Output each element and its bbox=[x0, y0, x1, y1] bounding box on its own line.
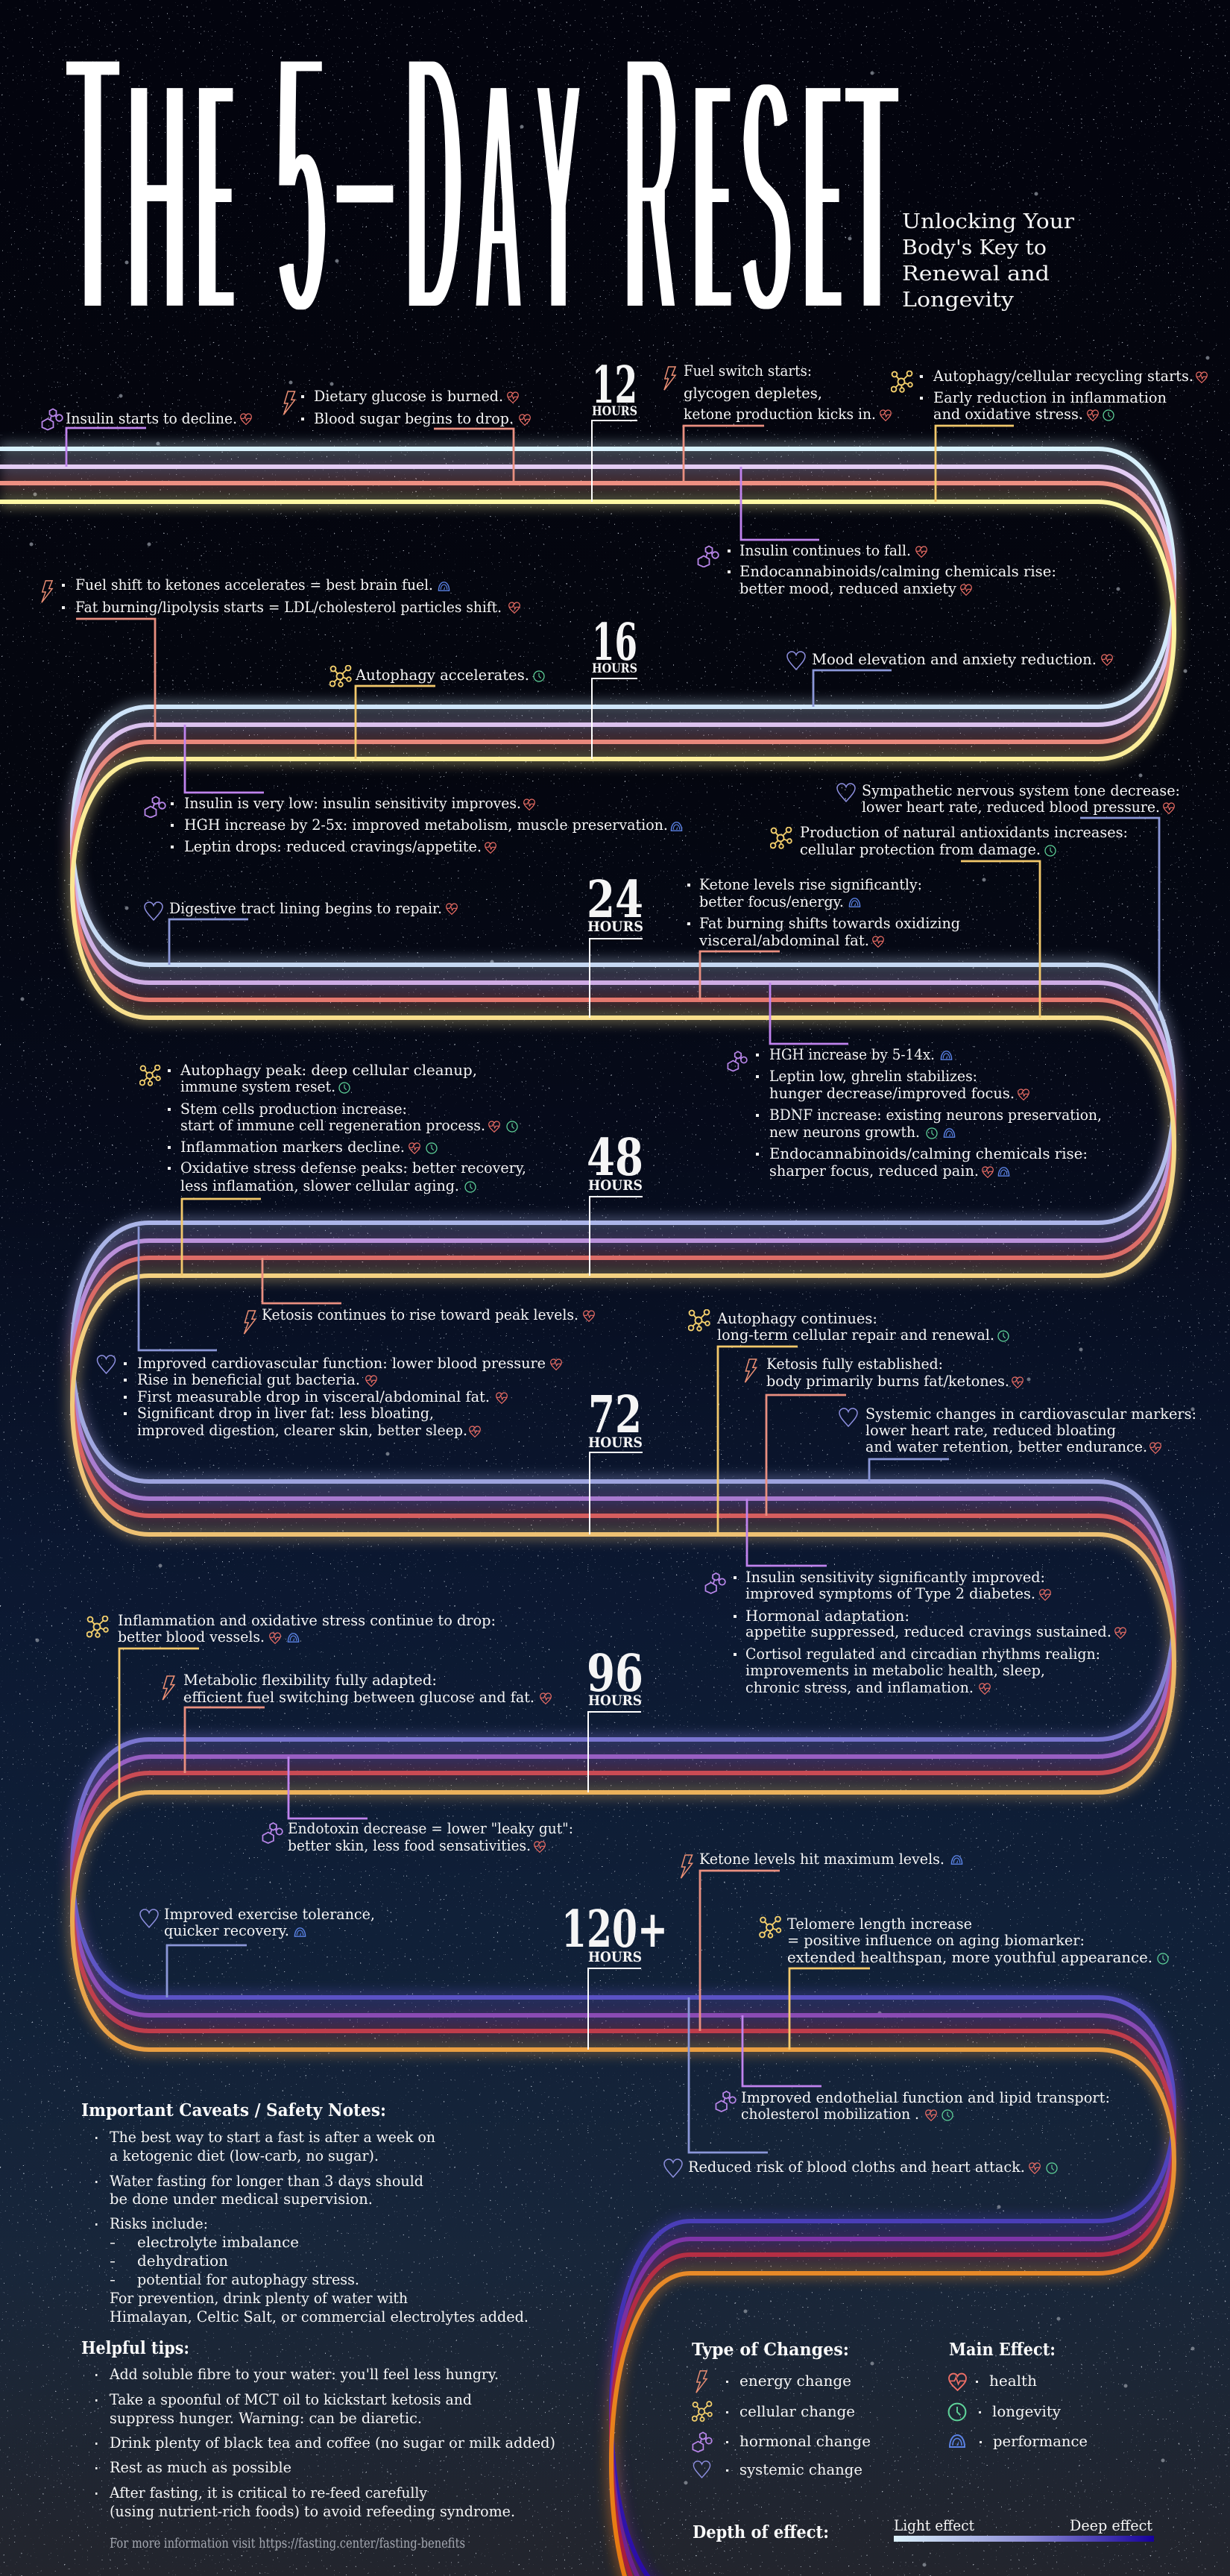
line: energy (salmon) bbox=[0, 483, 1174, 2576]
callout: insulin sensitivity significantly improved: Cortisol regulated and circadian rhythms realign: bbox=[745, 1645, 1100, 1663]
callout: metabolic flexibility: Metabolic flexibility fully adapted: bbox=[183, 1671, 437, 1689]
callout: fuel switch starts bbox=[664, 362, 891, 483]
marker: 120+ hours bbox=[561, 1900, 668, 2050]
heading: type of changes: Type of Changes: bbox=[692, 2340, 849, 2360]
subtitle: Renewal and bbox=[902, 262, 1050, 286]
subtitle: Longevity bbox=[902, 289, 1015, 312]
marker: 48 hours: 48 bbox=[587, 1128, 643, 1188]
callout: ketone levels rise: Fat burning shifts towards oxidizing bbox=[699, 914, 960, 932]
callout: insulin continues to fall: better mood, reduced anxiety bbox=[739, 579, 957, 597]
callout: autophagy starts: Early reduction in inflammation bbox=[933, 388, 1167, 406]
marker: 72 hours: HOURS bbox=[588, 1435, 643, 1451]
title: T bbox=[847, 0, 897, 394]
title: E bbox=[808, 0, 838, 394]
callout: fuel shift to ketones: Fuel shift to ketones accelerates = best brain fuel. bbox=[75, 576, 433, 593]
panel: helpful tips: Add soluble fibre to your water: you'll feel less hungry. bbox=[109, 2365, 499, 2383]
marker: 12 hours bbox=[592, 356, 637, 502]
heading: depth of effect: Depth of effect: bbox=[693, 2522, 829, 2542]
callout: reduced risk of blood cloths: Reduced risk of blood cloths and heart attack. bbox=[688, 2158, 1025, 2176]
panel: important caveats and safety notes: Himalayan, Celtic Salt, or commercial electrolytes added. bbox=[110, 2308, 529, 2325]
marker: 24 hours: HOURS bbox=[587, 919, 643, 935]
callout: ketone levels hit maximum bbox=[681, 1850, 962, 2031]
callout: ketone levels rise bbox=[687, 875, 960, 1000]
marker: 72 hours: 72 bbox=[588, 1385, 642, 1445]
callout: inflammation and oxidative stress bbox=[87, 1611, 496, 1800]
legend: type of changes: energy change bbox=[739, 2372, 851, 2390]
callout: telomere length: Telomere length increase bbox=[787, 1915, 972, 1933]
panel: helpful tips: suppress hunger. Warning: can be diaretic. bbox=[110, 2409, 422, 2427]
marker: 16 hours bbox=[592, 613, 637, 759]
callout: improved cardiovascular function: Rise in beneficial gut bacteria. bbox=[137, 1370, 360, 1388]
callout: ketone levels rise: visceral/abdominal fat. bbox=[698, 931, 869, 949]
callout: HGH increase 5-14x: BDNF increase: existing neurons preservation, bbox=[769, 1106, 1102, 1124]
callout: systemic changes in cardiovascular markers: Systemic changes in cardiovascular markers: bbox=[865, 1405, 1196, 1423]
callout: digestive tract bbox=[145, 899, 457, 965]
callout: autophagy continues: long-term cellular repair and renewal. bbox=[717, 1326, 994, 1344]
title bbox=[68, 0, 897, 407]
callout: insulin starts to decline: Insulin starts to decline. bbox=[66, 409, 237, 427]
callout: HGH increase 5-14x: new neurons growth. bbox=[769, 1123, 920, 1141]
callout: fuel switch starts: glycogen depletes, bbox=[684, 384, 822, 402]
callout: autophagy continues: Autophagy continues: bbox=[716, 1309, 877, 1327]
callout: inflammation and oxidative stress: better blood vessels. bbox=[118, 1628, 265, 1646]
callout: insulin continues to fall: Insulin continues to fall. bbox=[739, 541, 911, 559]
callout: digestive tract: Digestive tract lining begins to repair. bbox=[169, 899, 442, 917]
callout: inflammation and oxidative stress: Inflammation and oxidative stress continue to drop: bbox=[118, 1611, 496, 1629]
title: – bbox=[333, 84, 397, 277]
callout: metabolic flexibility: efficient fuel switching between glucose and fat. bbox=[183, 1688, 534, 1706]
callout: telomere length: extended healthspan, more youthful appearance. bbox=[787, 1948, 1152, 1966]
marker: 12 hours: 12 bbox=[592, 356, 637, 415]
legend: depth of effect: Light effect bbox=[894, 2516, 974, 2534]
callout: HGH increase 5-14x bbox=[728, 983, 1102, 1180]
callout: natural antioxidants: Production of natural antioxidants increases: bbox=[800, 823, 1128, 841]
marker: 96 hours bbox=[587, 1644, 643, 1792]
callout: autophagy accelerates: Autophagy accelerates. bbox=[355, 666, 529, 684]
callout: telomere length bbox=[760, 1915, 1168, 2050]
title: Y bbox=[535, 0, 581, 394]
subtitle bbox=[902, 210, 1074, 312]
callout: systemic changes in cardiovascular markers: and water retention, better endurance. bbox=[865, 1437, 1147, 1455]
callout: systemic changes in cardiovascular markers bbox=[839, 1405, 1196, 1481]
subtitle: Unlocking Your bbox=[902, 210, 1074, 233]
callout: HGH increase 5-14x: Leptin low, ghrelin stabilizes: bbox=[769, 1067, 977, 1085]
callout: autophagy peak bbox=[140, 1061, 526, 1276]
callout: autophagy peak: start of immune cell regeneration process. bbox=[180, 1116, 485, 1134]
glowing lines: the fasting timeline ribbon bbox=[0, 449, 1174, 2576]
title: E bbox=[201, 0, 230, 394]
callout: insulin sensitivity significantly improved: improved symptoms of Type 2 diabetes. bbox=[745, 1584, 1035, 1602]
subtitle: Body's Key to bbox=[902, 236, 1047, 259]
callout: sympathetic nervous system bbox=[837, 781, 1180, 1011]
legend: type of changes: cellular change bbox=[739, 2402, 855, 2420]
callout: autophagy continues bbox=[689, 1309, 1009, 1534]
panel: important caveats and safety notes: a ketogenic diet (low-carb, no sugar). bbox=[110, 2147, 379, 2164]
heading: main effect: Main Effect: bbox=[949, 2340, 1056, 2360]
marker: 120+ hours: HOURS bbox=[588, 1949, 642, 1965]
callout: ketosis continues bbox=[244, 1258, 594, 1334]
panel: helpful tips: (using nutrient-rich foods) to avoid refeeding syndrome. bbox=[110, 2502, 515, 2520]
line glow bbox=[0, 449, 1174, 2576]
marker: 120+ hours: 120+ bbox=[561, 1900, 668, 1959]
callout: improved exercise tolerance bbox=[140, 1905, 375, 1997]
callout: autophagy peak: Oxidative stress defense peaks: better recovery, bbox=[180, 1159, 526, 1177]
callout: insulin sensitivity significantly improved: appetite suppressed, reduced cravings sustained. bbox=[745, 1622, 1111, 1640]
callout: improved exercise tolerance: quicker recovery. bbox=[164, 1921, 289, 1939]
callout: autophagy starts: Autophagy/cellular recycling starts. bbox=[933, 367, 1193, 385]
heading: helpful tips: Helpful tips: bbox=[81, 2338, 189, 2358]
callout: improved cardiovascular function: improved digestion, clearer skin, better sleep. bbox=[137, 1421, 467, 1439]
marker: 16 hours: HOURS bbox=[592, 661, 637, 676]
marker: 48 hours: HOURS bbox=[588, 1177, 643, 1194]
callout: insulin starts to decline bbox=[42, 409, 251, 467]
callout: improved endothelial function bbox=[716, 2015, 1110, 2123]
panel: important caveats and safety notes: For prevention, drink plenty of water with bbox=[110, 2289, 408, 2307]
callout: dietary glucose: Dietary glucose is burned. bbox=[314, 387, 503, 405]
legend: main effect: longevity bbox=[992, 2402, 1062, 2420]
callout: sympathetic nervous system: lower heart rate, reduced blood pressure. bbox=[862, 798, 1160, 816]
callout: metabolic flexibility bbox=[163, 1671, 551, 1773]
callout: fuel shift to ketones bbox=[42, 576, 520, 742]
legend: type of changes: systemic change bbox=[739, 2460, 862, 2478]
panel: important caveats and safety notes: potential for autophagy stress. bbox=[137, 2270, 359, 2288]
callout: improved cardiovascular function: Significant drop in liver fat: less bloating, bbox=[137, 1404, 434, 1422]
title: H bbox=[128, 0, 186, 394]
callout: insulin is very low: Leptin drops: reduced cravings/appetite. bbox=[184, 837, 482, 855]
callout: autophagy starts: and oxidative stress. bbox=[933, 405, 1083, 423]
panel: helpful tips: Rest as much as possible bbox=[110, 2458, 291, 2476]
callout: endotoxin decrease bbox=[262, 1757, 573, 1854]
callout: improved cardiovascular function: First measurable drop in visceral/abdominal fat. bbox=[137, 1388, 490, 1405]
callout: fuel switch starts: ketone production kicks in. bbox=[684, 405, 876, 423]
callout: endotoxin decrease: better skin, less food sensativities. bbox=[288, 1836, 531, 1854]
panel: helpful tips: Drink plenty of black tea and coffee (no sugar or milk added) bbox=[110, 2434, 555, 2451]
marker: 12 hours: HOURS bbox=[592, 404, 637, 419]
legend: type of changes: hormonal change bbox=[739, 2432, 871, 2450]
callout: insulin sensitivity significantly improved: Hormonal adaptation: bbox=[745, 1607, 909, 1625]
callout: ketone levels rise: better focus/energy. bbox=[699, 892, 844, 910]
callout: dietary glucose bbox=[283, 387, 530, 483]
callout: systemic changes in cardiovascular markers: lower heart rate, reduced bloating bbox=[865, 1421, 1116, 1439]
callout: fuel shift to ketones: Fat burning/lipolysis starts = LDL/cholesterol particles shift. bbox=[75, 598, 502, 616]
callout: improved cardiovascular function: Improved cardiovascular function: lower blood pressure bbox=[137, 1354, 546, 1372]
callout: autophagy peak: less inflamation, slower cellular aging. bbox=[180, 1177, 459, 1194]
callout: fuel switch starts: Fuel switch starts: bbox=[684, 362, 812, 380]
legend: depth of effect: Deep effect bbox=[1070, 2516, 1152, 2534]
callout: ketosis fully established bbox=[745, 1355, 1023, 1516]
callout: insulin sensitivity significantly improved: improvements in metabolic health, sleep, bbox=[745, 1661, 1045, 1679]
legend: depth of effect bbox=[693, 2516, 1154, 2542]
panel: important caveats and safety notes: Water fasting for longer than 3 days should bbox=[110, 2172, 423, 2190]
panel: important caveats and safety notes bbox=[81, 2100, 529, 2325]
callout: HGH increase 5-14x: HGH increase by 5-14x. bbox=[769, 1045, 935, 1063]
panel: important caveats and safety notes: The best way to start a fast is after a week on bbox=[110, 2128, 435, 2146]
callout: endotoxin decrease: Endotoxin decrease = lower "leaky gut": bbox=[288, 1819, 573, 1837]
panel: important caveats and safety notes: dehydration bbox=[137, 2252, 228, 2270]
callout: insulin is very low: Insulin is very low: insulin sensitivity improves. bbox=[184, 794, 521, 812]
callout: HGH increase 5-14x: Endocannabinoids/calming chemicals rise: bbox=[769, 1144, 1088, 1162]
panel: important caveats and safety notes: - bbox=[110, 2270, 116, 2288]
panel: helpful tips: Take a spoonful of MCT oil to kickstart ketosis and bbox=[110, 2390, 472, 2408]
callout: insulin is very low bbox=[145, 725, 682, 855]
callout: insulin sensitivity significantly improved: chronic stress, and inflamation. bbox=[745, 1678, 974, 1696]
legend: type of changes bbox=[692, 2340, 871, 2478]
marker: 24 hours bbox=[587, 870, 643, 1018]
callout: insulin continues to fall: Endocannabinoids/calming chemicals rise: bbox=[739, 562, 1056, 580]
panel: important caveats and safety notes: - bbox=[110, 2233, 116, 2251]
panel: helpful tips: After fasting, it is critical to re-feed carefully bbox=[109, 2484, 428, 2501]
callout: mood elevation: Mood elevation and anxiety reduction. bbox=[812, 650, 1097, 668]
line: hormonal (lilac) bbox=[0, 467, 1174, 2576]
panel: helpful tips bbox=[81, 2338, 555, 2520]
marker: 48 hours bbox=[587, 1128, 643, 1276]
callout: insulin sensitivity significantly improved: Insulin sensitivity significantly improved: bbox=[745, 1568, 1045, 1586]
callout: autophagy peak: immune system reset. bbox=[180, 1077, 335, 1095]
callout: dietary glucose: Blood sugar begins to drop. bbox=[314, 409, 514, 427]
callout: ketone levels hit maximum: Ketone levels hit maximum levels. bbox=[699, 1850, 944, 1868]
callout: improved cardiovascular function bbox=[97, 1226, 561, 1439]
marker: 96 hours: HOURS bbox=[588, 1692, 642, 1709]
callout: ketosis fully established: Ketosis fully established: bbox=[766, 1355, 943, 1373]
callout: insulin is very low: HGH increase by 2-5x: improved metabolism, muscle preservation. bbox=[184, 816, 668, 834]
legend: main effect bbox=[949, 2340, 1088, 2450]
heading: caveats: Important Caveats / Safety Notes: bbox=[81, 2100, 386, 2120]
panel: important caveats and safety notes: electrolyte imbalance bbox=[137, 2233, 299, 2251]
callout: ketosis continues: Ketosis continues to rise toward peak levels. bbox=[262, 1306, 578, 1323]
callout: autophagy peak: Inflammation markers decline. bbox=[180, 1138, 405, 1156]
callout: improved endothelial function: cholesterol mobilization . bbox=[741, 2105, 919, 2123]
callout: improved endothelial function: Improved endothelial function and lipid transport: bbox=[741, 2088, 1110, 2106]
callout: natural antioxidants: cellular protection from damage. bbox=[800, 840, 1041, 858]
callout: HGH increase 5-14x: hunger decrease/improved focus. bbox=[769, 1084, 1015, 1102]
marker: 96 hours: 96 bbox=[587, 1644, 643, 1704]
legend: main effect: health bbox=[989, 2372, 1037, 2390]
marker: 72 hours bbox=[588, 1385, 643, 1534]
panel: important caveats and safety notes: Risks include: bbox=[110, 2214, 208, 2232]
panel: important caveats and safety notes: be done under medical supervision. bbox=[110, 2190, 373, 2208]
callout: insulin sensitivity significantly improved bbox=[705, 1499, 1126, 1696]
callout: natural antioxidants bbox=[771, 823, 1128, 1018]
callout: mood elevation bbox=[787, 650, 1112, 707]
callout: ketone levels rise: Ketone levels rise significantly: bbox=[699, 875, 922, 893]
footnote: For more information visit https://fasting.center/fasting-benefits bbox=[110, 2536, 465, 2551]
title: S bbox=[741, 0, 792, 394]
marker: 24 hours: 24 bbox=[587, 870, 643, 930]
callout: ketosis fully established: body primarily burns fat/ketones. bbox=[766, 1372, 1009, 1390]
marker: 16 hours: 16 bbox=[592, 613, 637, 673]
callout: HGH increase 5-14x: sharper focus, reduced pain. bbox=[769, 1162, 979, 1180]
callout: autophagy accelerates bbox=[330, 666, 544, 759]
callout: insulin continues to fall bbox=[698, 467, 1056, 597]
title: A bbox=[475, 0, 522, 394]
callout: telomere length: = positive influence on aging biomarker: bbox=[787, 1931, 1085, 1949]
callout: improved exercise tolerance: Improved exercise tolerance, bbox=[164, 1905, 375, 1923]
callout: autophagy starts bbox=[892, 367, 1207, 502]
line: cellular (yellow) bbox=[0, 502, 1174, 2576]
callout: autophagy peak: Stem cells production increase: bbox=[180, 1100, 407, 1118]
callout: autophagy peak: Autophagy peak: deep cellular cleanup, bbox=[180, 1061, 477, 1079]
line: systemic (blue) bbox=[0, 449, 1174, 2576]
callout: sympathetic nervous system: Sympathetic nervous system tone decrease: bbox=[862, 781, 1180, 799]
panel: important caveats and safety notes: - bbox=[110, 2252, 116, 2270]
callout: reduced risk of blood cloths bbox=[664, 1997, 1057, 2177]
title: E bbox=[698, 0, 728, 394]
legend: main effect: performance bbox=[993, 2432, 1088, 2450]
